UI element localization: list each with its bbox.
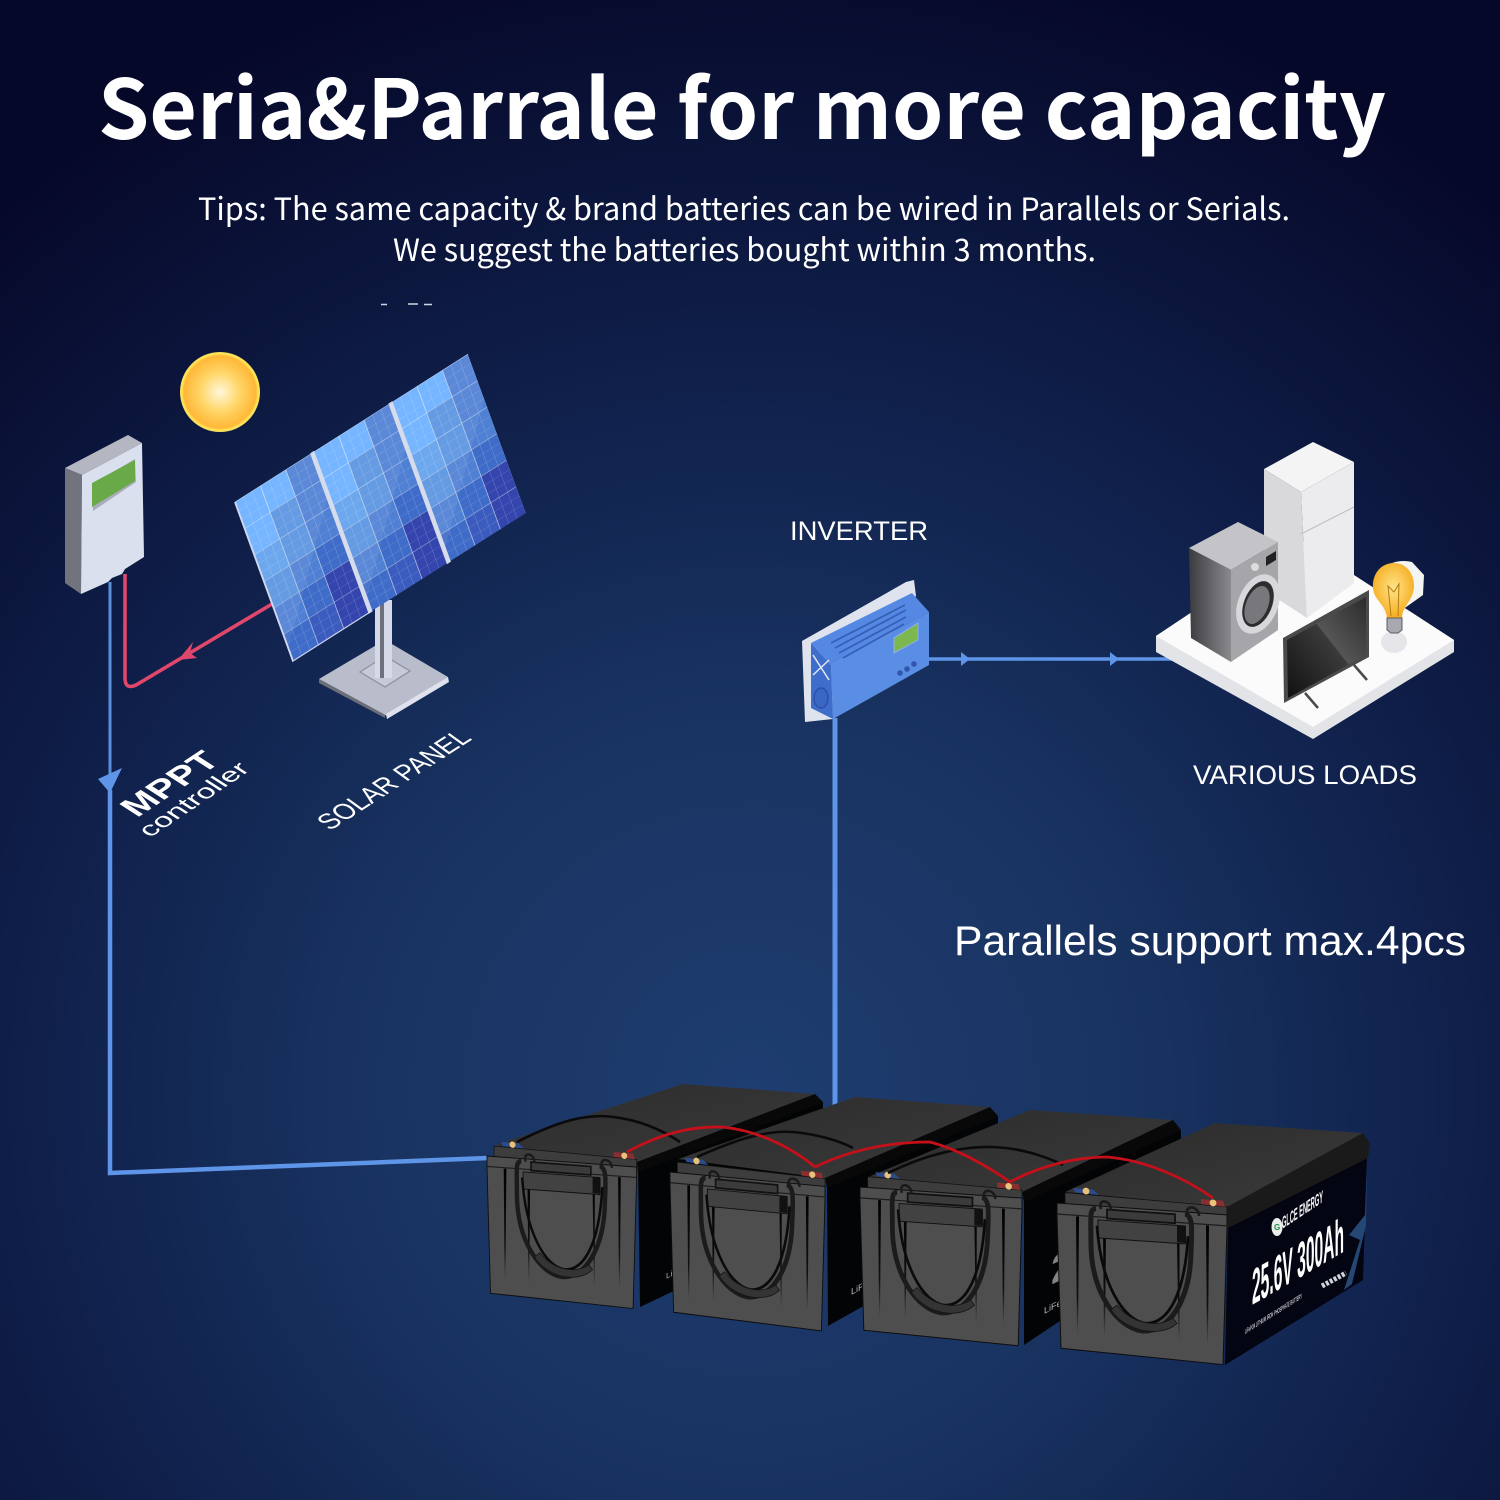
arrow: first — [961, 652, 970, 666]
battery 3: 2 — [1051, 1238, 1073, 1293]
battery 1: LiFe — [666, 1264, 682, 1281]
icon: lightning bolt — [1344, 1160, 1367, 1290]
tips text: Tips: The same capacity & brand batteries can be wired in Parallels or Serials. — [198, 184, 1290, 229]
wire: controller to battery bank — [98, 582, 488, 1173]
label: various loads: VARIOUS LOADS — [1193, 760, 1417, 790]
icon: various loads — [1156, 442, 1454, 739]
platform — [1156, 540, 1454, 739]
wire: inverter to loads — [928, 652, 1180, 666]
battery 2: LiFePO — [851, 1272, 881, 1298]
small marks — [381, 303, 432, 306]
battery 4 — [1057, 1123, 1370, 1365]
television — [1283, 590, 1369, 708]
logo: G — [1274, 1223, 1280, 1232]
arrow: second — [1110, 652, 1119, 666]
washing machine — [1189, 522, 1288, 662]
battery 3 — [860, 1110, 1181, 1346]
label: MPPT controller: MPPT — [112, 745, 229, 822]
wire: inverter to battery — [832, 718, 838, 1110]
certification marks — [1322, 1273, 1346, 1286]
battery 3: LiFePO — [1044, 1291, 1074, 1317]
label: solar panel: SOLAR PANEL — [310, 725, 478, 835]
battery 2 — [670, 1097, 998, 1331]
arrow: blue wire — [98, 768, 122, 793]
label: parallels support: Parallels support max.4pcs — [954, 917, 1466, 964]
red linking cables — [627, 1127, 1213, 1198]
panel surface — [235, 353, 526, 662]
tips text: We suggest the batteries bought within 3 months. — [393, 225, 1096, 270]
battery bank — [487, 1084, 1370, 1365]
arrow: red wire — [178, 642, 197, 660]
battery 4: LiFePO4 LITHIUM IRON PHOSPHATE BATTERY — [1245, 1292, 1302, 1336]
icon: MPPT controller — [65, 435, 144, 594]
label: MPPT controller: controller — [132, 758, 256, 841]
icon: solar panel — [235, 353, 526, 719]
stand — [319, 600, 449, 719]
tips text — [198, 184, 1290, 270]
battery 4: GLCE ENERGY — [1282, 1186, 1323, 1233]
battery 1 — [487, 1084, 823, 1309]
logo — [1272, 1186, 1323, 1236]
label: MPPT controller — [112, 745, 256, 841]
fridge — [1264, 442, 1354, 618]
wire: solar panel to controller — [125, 574, 272, 686]
light bulb — [1373, 561, 1424, 653]
title: Seria&Parrale for more capacity — [98, 44, 1386, 163]
label: inverter: INVERTER — [790, 516, 928, 546]
icon: inverter — [802, 580, 929, 722]
icon: sun — [180, 352, 260, 432]
